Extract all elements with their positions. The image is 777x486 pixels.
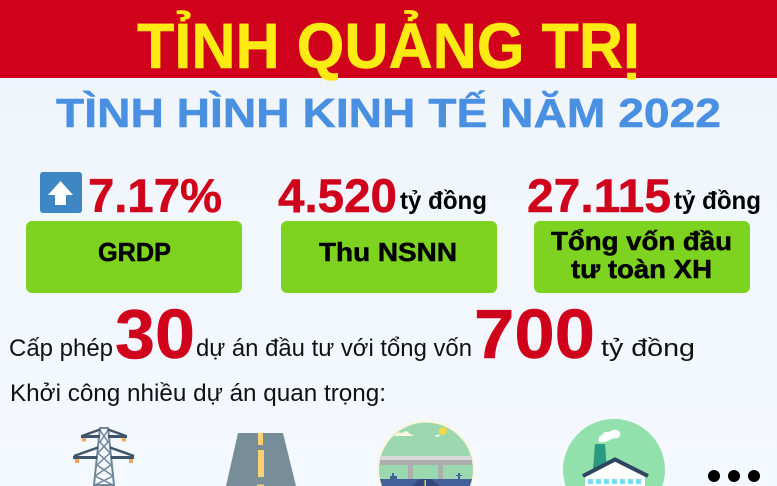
title: TỈNH QUẢNG TRỊ bbox=[137, 9, 640, 82]
icon: overpass bbox=[377, 420, 475, 486]
value: state revenue: tỷ đồng bbox=[400, 187, 487, 215]
text block: investment licences: 700 bbox=[474, 295, 595, 373]
value: total investment: 27.115 bbox=[527, 169, 671, 222]
text block: investment licences: 30 bbox=[115, 295, 195, 373]
header banner bbox=[0, 0, 777, 82]
label box: Thu NSNN: Thu NSNN bbox=[319, 237, 457, 267]
text block: investment licences: tỷ đồng bbox=[601, 335, 695, 362]
icon: up arrow bbox=[40, 172, 82, 213]
value: state revenue: 4.520 bbox=[278, 169, 397, 222]
text block: investment licences: dự án đầu tư với tổng vốn bbox=[196, 335, 472, 362]
subtitle: TÌNH HÌNH KINH TẾ NĂM 2022 bbox=[56, 90, 721, 136]
value: total investment bbox=[527, 169, 761, 222]
text block: investment licences bbox=[9, 295, 695, 373]
label box: GRDP bbox=[26, 221, 242, 293]
panel: total social investment bbox=[527, 169, 761, 293]
label box: Thu NSNN bbox=[281, 221, 497, 293]
icon: ellipsis bbox=[708, 470, 760, 482]
value: GRDP growth: 7.17% bbox=[88, 169, 222, 222]
label box: total investment: tư toàn XH bbox=[571, 254, 712, 284]
text block: investment licences: Cấp phép bbox=[9, 335, 113, 362]
icon: road bbox=[226, 433, 296, 486]
text block: projects heading: Khởi công nhiều dự án quan trọng: bbox=[10, 380, 386, 407]
value: total investment: tỷ đồng bbox=[674, 187, 761, 215]
label box: total investment: Tổng vốn đầu bbox=[551, 226, 732, 256]
panel: GRDP bbox=[26, 169, 242, 293]
icon: factory bbox=[563, 419, 665, 486]
label box: total investment bbox=[534, 221, 750, 293]
icon: power pylon bbox=[73, 428, 134, 485]
label box: GRDP: GRDP bbox=[98, 237, 171, 267]
value: state revenue bbox=[278, 169, 487, 222]
panel: Thu NSNN bbox=[278, 169, 497, 293]
